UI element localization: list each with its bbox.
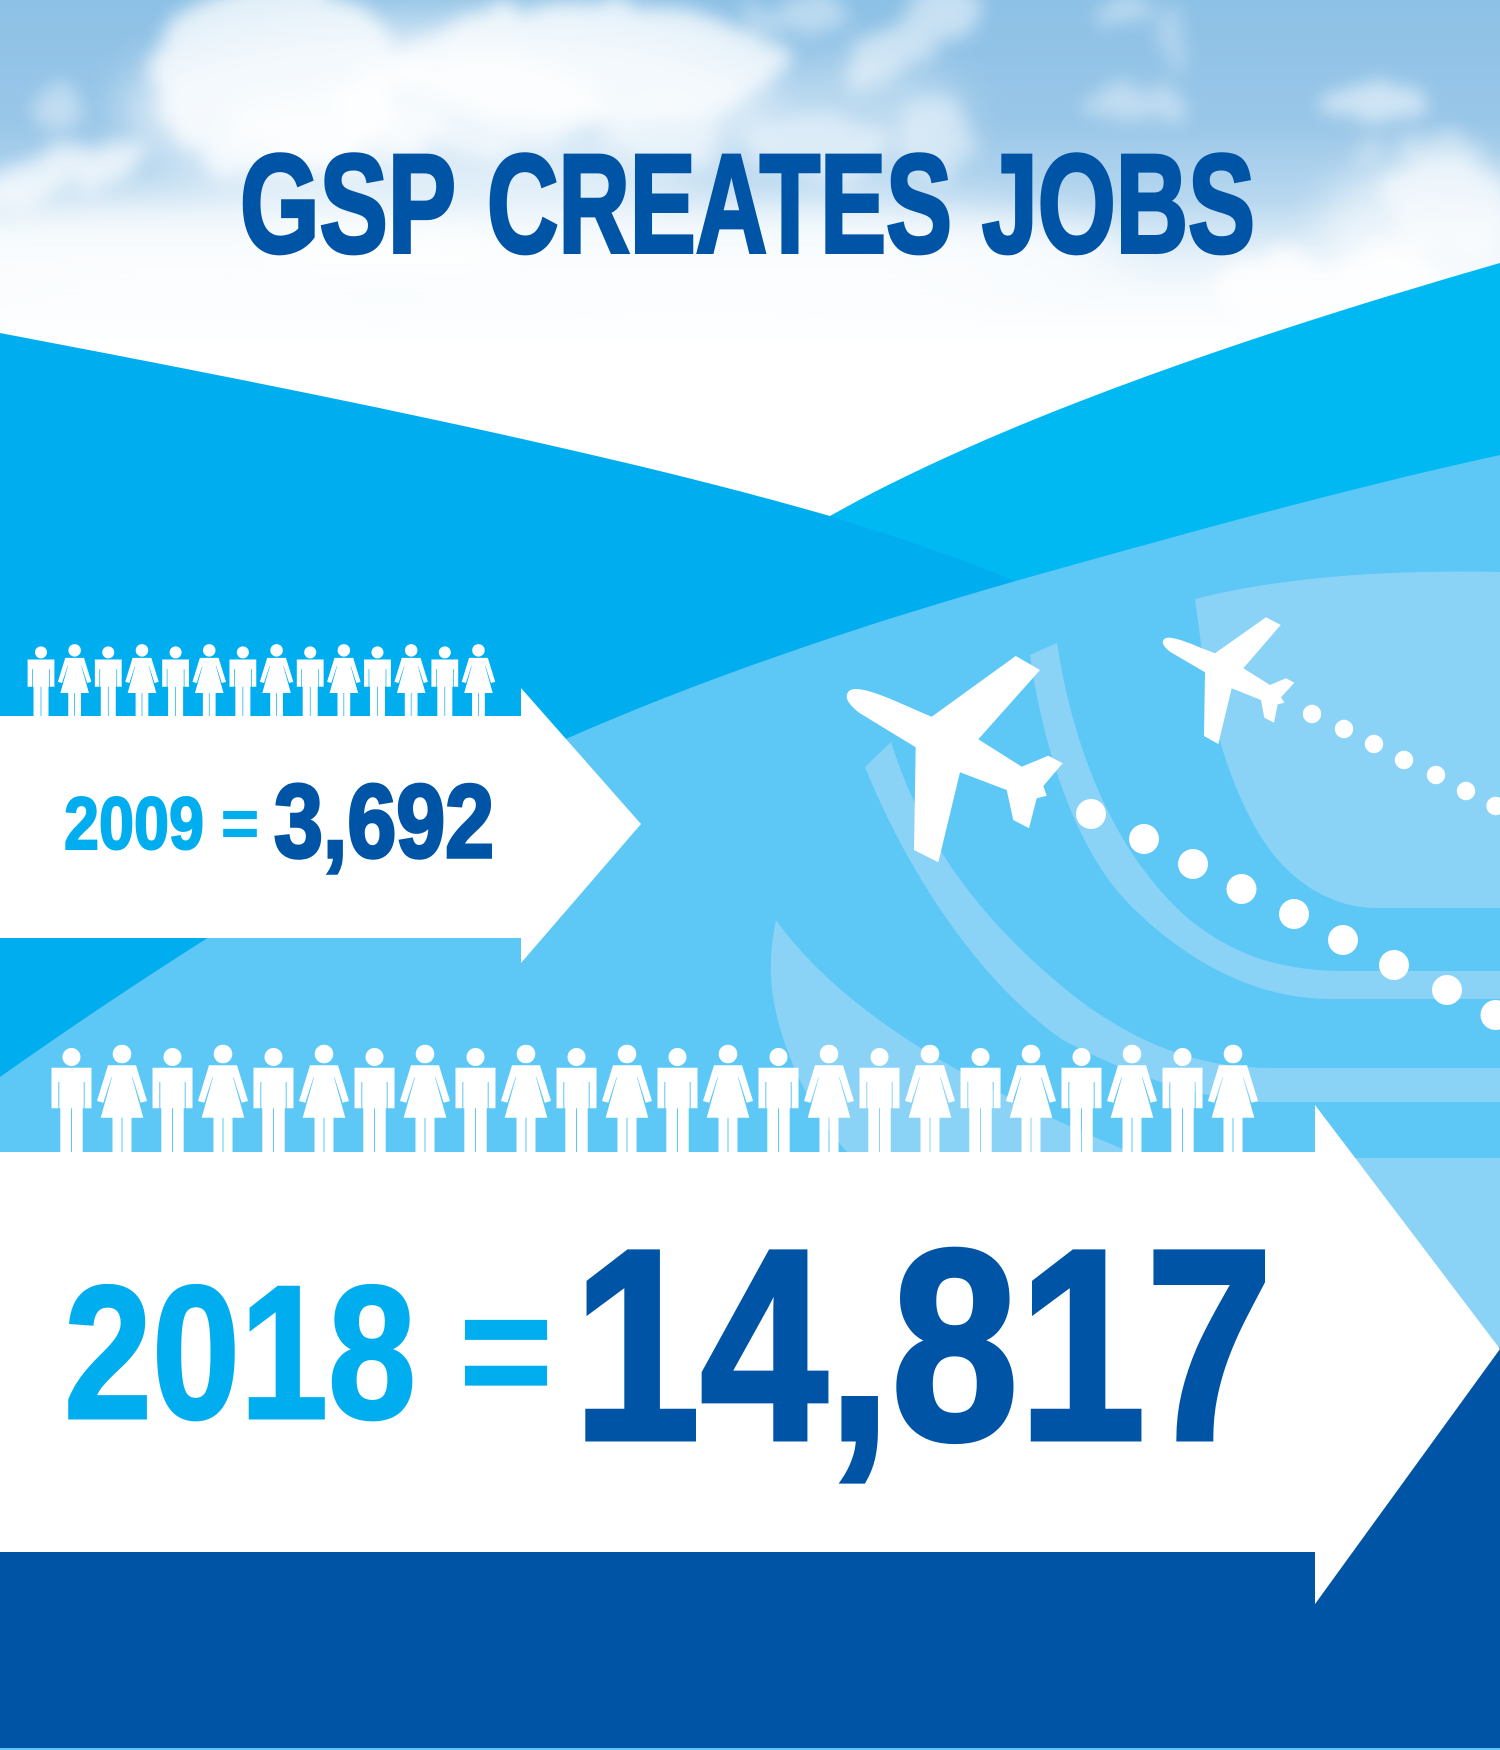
sky with clouds [0, 0, 1500, 660]
people row: 2018 [52, 1045, 1258, 1152]
title: CREATES [487, 125, 952, 282]
arrow: 2009 [0, 688, 641, 963]
icon: small plane [1163, 617, 1294, 744]
value: 14,817: 14,817 [573, 1193, 1273, 1497]
value: 3,692: 3,692 [274, 764, 494, 880]
title [240, 125, 1255, 282]
label: 2018: 2018 [64, 1247, 416, 1459]
large plane dotted trail [1076, 799, 1500, 1030]
people row: 2009 [28, 644, 495, 716]
dark blue base [0, 1347, 1500, 1748]
equals: 2018: = [459, 1256, 553, 1446]
flight trails [771, 572, 1500, 1350]
light blue foreground hill [0, 455, 1500, 1750]
icon: large plane [847, 656, 1063, 862]
label: 2009: 2009 [64, 782, 204, 865]
title: JOBS [982, 125, 1255, 282]
right hill [830, 263, 1500, 700]
equals: 2009: = [221, 786, 259, 860]
left hill [0, 333, 1020, 1100]
title: GSP [240, 125, 456, 282]
small plane dotted trail [1303, 705, 1500, 815]
arrow: 2018 [0, 1105, 1500, 1604]
